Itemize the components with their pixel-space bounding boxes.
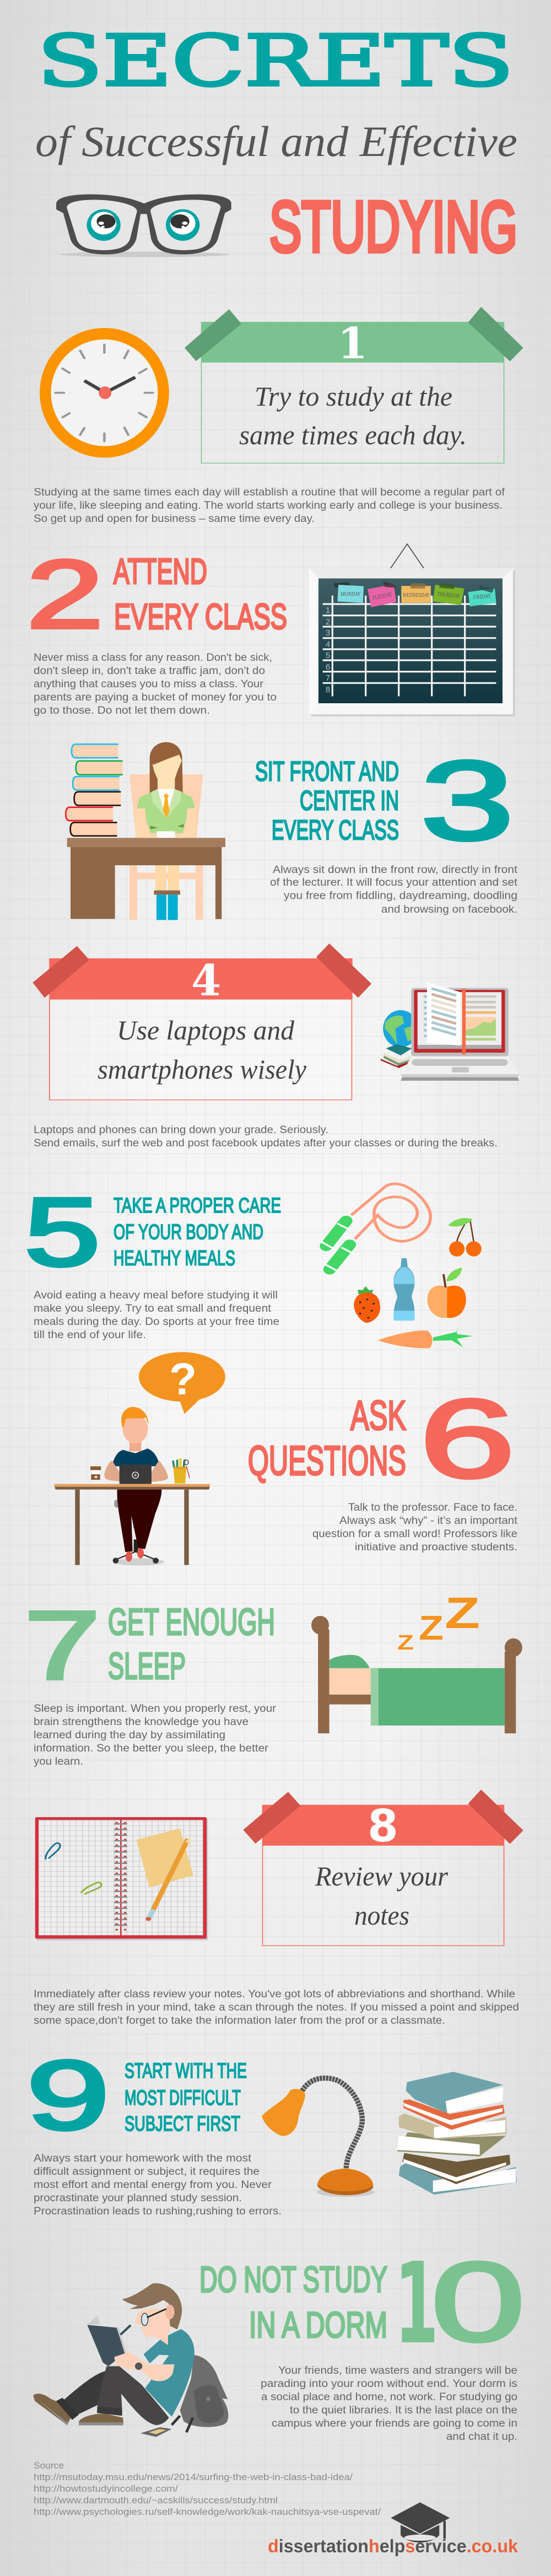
icon: laptop with open book and globe [381, 982, 520, 1081]
heading tip 2: EVERY CLASS [114, 596, 287, 637]
icon: timetable board [309, 544, 515, 716]
sources [34, 2461, 381, 2517]
heading tip 10: DO NOT STUDY [199, 2259, 387, 2300]
number 1: 1 [338, 319, 368, 369]
text block: tip 3 [270, 864, 518, 915]
text block: tip 5: till the end of your life. [34, 1329, 146, 1341]
text block: tip 8 [34, 1988, 519, 2027]
panel: tip 3 [66, 738, 518, 920]
icon: timetable board: THURSDAY [437, 591, 461, 600]
icon: timetable board: WEDNESDAY [403, 592, 430, 599]
icon: glasses with eyes [56, 195, 231, 257]
text block: tip 2: anything that causes you to miss a class. Your [34, 678, 264, 690]
text block: tip 6: question for a small word! Professors like [312, 1528, 517, 1540]
text block: tip 2 [34, 652, 277, 716]
tip 8 script [315, 1861, 449, 1931]
icon: person at desk [54, 1407, 210, 1566]
book stack [66, 744, 123, 836]
icon: clock [40, 328, 169, 457]
title: Secrets: SECRETS [37, 20, 514, 101]
text block: tip 8: they are still fresh in your mind, take a scan through the notes. If you missed a point and skipped [34, 2002, 519, 2013]
text block: tip 5: meals during the day. Do sports at your free time [34, 1316, 279, 1328]
text block: tip 10: a social place and home, not work. For studying go [261, 2391, 517, 2403]
panel: tip 1 [34, 307, 523, 525]
sources: Source [34, 2461, 64, 2471]
number 2: 2 [26, 541, 104, 649]
text block: tip 1: So get up and open for business – same time every day. [34, 513, 315, 525]
heading tip 9 [125, 2060, 247, 2136]
panel: tip 10 [33, 2239, 525, 2443]
icon: zzz: Z [419, 1609, 444, 1647]
icon: graduation cap [391, 2502, 450, 2542]
text block: tip 2: go to those. Do not let them down. [34, 705, 210, 716]
text block: tip 10: parading into your room without end. Your dorm is [261, 2378, 517, 2390]
text block: tip 6: Talk to the professor. Face to face. [348, 1502, 517, 1513]
text block: tip 8: Immediately after class review your notes. You've got lots of abbreviations and shorthand. While [34, 1988, 515, 2000]
icon: timetable board: 4 [326, 640, 330, 649]
text block: tip 1: your life, like sleeping and eating. The world starts working early and college is your business. [34, 500, 503, 511]
text block: tip 3: you free from fiddling, daydreaming, doodling [284, 890, 517, 902]
heading tip 10 [199, 2259, 387, 2345]
text block: tip 10: and chat it up. [446, 2431, 517, 2443]
text block: tip 10: to the quiet libraries. It is the last place on the [290, 2405, 517, 2416]
panel: tip 8 [34, 1790, 523, 2027]
text block: tip 4 [34, 1124, 498, 1149]
icon: zzz [397, 1588, 480, 1655]
text block: tip 6 [312, 1502, 518, 1553]
icon: student reading [33, 2283, 228, 2437]
icon: timetable board: 3 [326, 628, 330, 638]
icon: speech bubble [139, 1352, 225, 1414]
icon: timetable board: 2 [326, 617, 330, 627]
icon: book stack [397, 2072, 517, 2195]
icon: timetable board: TUESDAY [372, 591, 393, 602]
sources: http://www.psychologies.ru/self-knowledge/work/kak-nauchitsya-vse-uspevat/ [34, 2507, 381, 2517]
tip 1 script: same times each day. [239, 419, 467, 450]
heading tip 6: QUESTIONS [248, 1437, 406, 1484]
number 3: 3 [420, 738, 514, 864]
text block: tip 7: learned during the day by assimilating [34, 1729, 225, 1741]
icon: zzz: Z [445, 1588, 480, 1637]
subtitle: of Successful and Effective [35, 117, 517, 165]
icon: timetable board: 8 [326, 685, 330, 694]
icon: timetable board: 6 [326, 662, 330, 672]
text block: tip 2: Never miss a class for any reason. Don't be sick, [34, 652, 272, 664]
panel: tip 6 [54, 1352, 518, 1566]
tip 4 script [98, 1015, 307, 1085]
panel: header [35, 20, 517, 267]
heading tip 2: ATTEND [114, 551, 207, 591]
heading tip 7 [108, 1601, 275, 1687]
icon: timetable board: 7 [326, 673, 330, 683]
text block: tip 5: Avoid eating a heavy meal before studying it will [34, 1290, 278, 1301]
tip 8 script: notes [354, 1900, 409, 1931]
text block: tip 2: don't sleep in, don't take a traffic jam, don't do [34, 665, 265, 677]
text block: tip 10: Your friends, time wasters and strangers will be [278, 2365, 517, 2376]
panel: tip 7 [24, 1588, 522, 1767]
panel: tip 5 [24, 1178, 482, 1348]
text block: tip 10: campus where your friends are going to come in [272, 2418, 517, 2429]
banner 1 [185, 307, 523, 463]
panel: tip 2 [26, 541, 515, 716]
tip 1 script: Try to study at the [255, 381, 452, 412]
heading tip 5: OF YOUR BODY AND [114, 1221, 263, 1244]
text block: tip 2: parents are paying a bucket of money for you to [34, 692, 277, 703]
text block: tip 9: most effort and mental energy from you. Never [34, 2179, 272, 2191]
sources: http://www.dartmouth.edu/~acskills/success/study.html [34, 2496, 278, 2505]
icon: student at desk with books [66, 742, 225, 920]
text block: tip 10 [261, 2365, 517, 2443]
sources: http://howtostudyincollege.com/ [34, 2484, 178, 2494]
text block: tip 9: Procrastination leads to rushing,rushing to errors. [34, 2206, 282, 2217]
heading tip 7: SLEEP [108, 1645, 186, 1687]
number 9: 9 [26, 2040, 110, 2150]
number 7: 7 [24, 1592, 100, 1700]
heading tip 3: SIT FRONT AND [255, 756, 399, 787]
number 4: 4 [191, 956, 221, 1006]
text block: tip 8: some space,don't forget to take the information later from the prof or a classmate. [34, 2015, 445, 2027]
sources: http://msutoday.msu.edu/news/2014/surfing-the-web-in-class-bad-idea/ [34, 2472, 353, 2482]
number 8: 8 [368, 1801, 398, 1852]
number 10: 1 [395, 2239, 439, 2369]
heading tip 7: GET ENOUGH [108, 1601, 275, 1643]
text block: tip 7 [34, 1703, 277, 1767]
icon: desk lamp [262, 2078, 374, 2197]
text block: tip 4: Send emails, surf the web and post facebook updates after your classes or during the breaks. [34, 1138, 498, 1149]
heading tip 2 [114, 551, 287, 637]
text block: tip 7: information. So the better you sleep, the better [34, 1743, 269, 1754]
heading tip 5: HEALTHY MEALS [114, 1247, 235, 1270]
heading tip 6 [248, 1392, 406, 1484]
number 10 [395, 2239, 525, 2369]
heading tip 5 [114, 1194, 281, 1270]
heading tip 9: SUBJECT FIRST [125, 2112, 240, 2136]
icon: zzz: Z [397, 1631, 414, 1655]
icon: timetable board: FRIDAY [472, 592, 492, 601]
text block: tip 4: Laptops and phones can bring down your grade. Seriously. [34, 1124, 328, 1136]
text block: tip 9: Always start your homework with the most [34, 2153, 252, 2164]
icon: timetable board: 1 [326, 606, 330, 615]
text block: tip 1: Studying at the same times each day will establish a routine that will become a regular part of [34, 487, 505, 498]
heading tip 3: EVERY CLASS [272, 815, 399, 845]
heading tip 9: MOST DIFFICULT [125, 2087, 241, 2110]
icon: bed [311, 1616, 522, 1733]
banner 8 [243, 1790, 523, 1946]
banner 4 [33, 944, 371, 1100]
heading tip 3: CENTER IN [300, 785, 399, 816]
tip 4 script: smartphones wisely [98, 1054, 307, 1085]
icon: speech bubble: ? [169, 1354, 197, 1404]
logo wordmark: dissertationhelpservice.co.uk [268, 2536, 518, 2556]
text block: tip 3: and browsing on facebook. [381, 904, 517, 915]
heading tip 10: IN A DORM [249, 2304, 387, 2345]
text block: tip 6: initiative and proactive students. [355, 1542, 517, 1553]
text block: tip 6: Always ask “why” - it’s an important [339, 1515, 518, 1527]
number 5: 5 [24, 1178, 100, 1286]
number 10: 0 [431, 2239, 525, 2365]
panel: tip 4 [33, 944, 520, 1149]
text block: tip 9: difficult assignment or subject, it requires the [34, 2166, 260, 2178]
panel: tip 9 [26, 2040, 517, 2217]
heading tip 3 [255, 756, 399, 845]
tip 4 script: Use laptops and [117, 1015, 295, 1046]
text block: tip 9: procrastinate your planned study session. [34, 2192, 242, 2204]
heading tip 5: TAKE A PROPER CARE [114, 1194, 281, 1217]
number 6: 6 [419, 1376, 515, 1501]
text block: tip 9 [34, 2153, 282, 2217]
text block: tip 5 [34, 1290, 279, 1341]
heading tip 9: START WITH THE [125, 2060, 247, 2083]
icon: timetable board: 5 [326, 651, 330, 660]
icon: notebook [35, 1817, 208, 1941]
text block: tip 1 [34, 487, 505, 525]
text block: tip 5: make you sleepy. Try to eat small and frequent [34, 1303, 272, 1314]
heading tip 6: ASK [350, 1392, 406, 1438]
text block: tip 7: brain strengthens the knowledge you have [34, 1716, 249, 1728]
text block: tip 3: of the lecturer. It will focus your attention and set [270, 877, 518, 888]
tip 1 script [239, 381, 467, 450]
text block: tip 3: Always sit down in the front row, directly in front [273, 864, 518, 876]
icon: timetable board: MONDAY [340, 591, 361, 597]
text block: tip 7: you learn. [34, 1756, 83, 1767]
icon: jump rope [322, 1184, 430, 1271]
icon: healthy food [354, 1218, 482, 1348]
tip 8 script: Review your [315, 1861, 449, 1891]
logo [268, 2502, 518, 2556]
text block: tip 7: Sleep is important. When you properly rest, your [34, 1703, 277, 1715]
